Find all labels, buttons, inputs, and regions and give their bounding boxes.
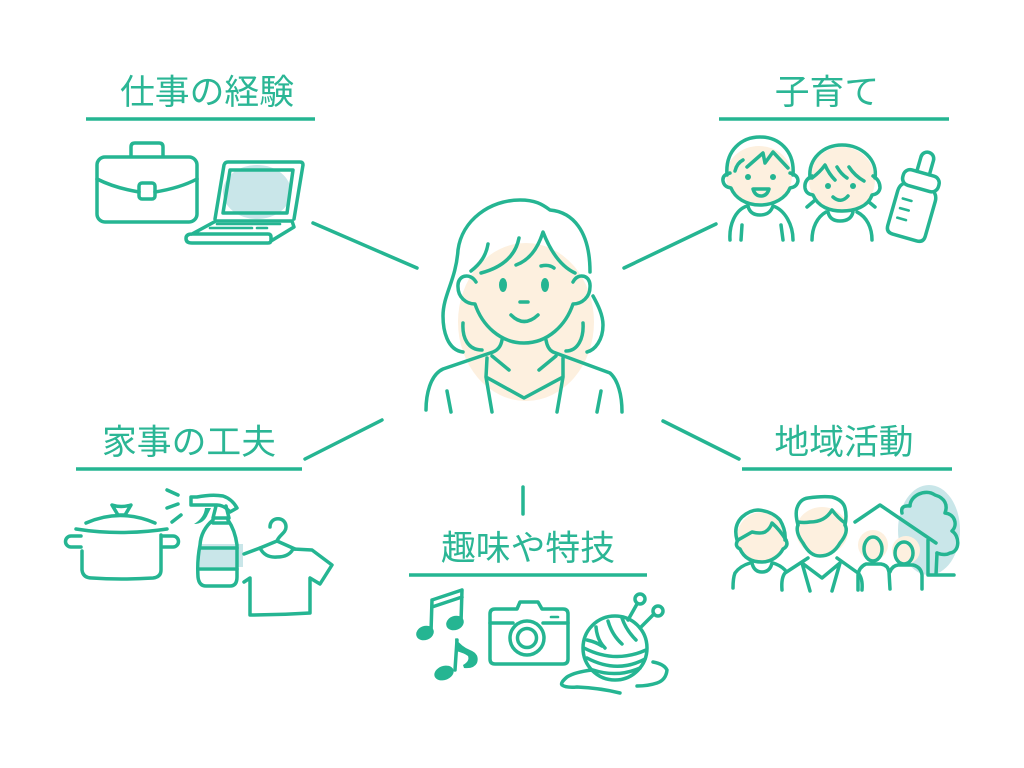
icon: baby bottle bbox=[886, 147, 948, 243]
icon: pot bbox=[66, 505, 178, 579]
icon: ball of yarn with needles bbox=[562, 594, 667, 693]
icon: briefcase bbox=[97, 143, 197, 222]
person: skin background circle bbox=[458, 243, 594, 401]
icon: boy bbox=[723, 137, 798, 240]
icon: spray bottle bbox=[191, 495, 243, 586]
central person illustration bbox=[426, 200, 622, 412]
icon: boy in community bbox=[733, 510, 787, 588]
person: eyes bbox=[499, 278, 549, 292]
icon: eighth note bbox=[432, 638, 478, 683]
icon: man bbox=[782, 497, 862, 591]
heading: work experience: 仕事の経験 bbox=[120, 73, 294, 112]
connector: lower left bbox=[305, 420, 382, 459]
person: face bbox=[458, 265, 590, 343]
heading: community activity: 地域活動 bbox=[774, 423, 914, 462]
icon: beamed musical note bbox=[414, 590, 466, 643]
heading: parenting: 子育て bbox=[775, 73, 879, 112]
person: fringe bbox=[471, 232, 575, 273]
connector: top left bbox=[313, 223, 417, 268]
icon: girl bbox=[805, 145, 880, 240]
icon: T-shirt on hanger bbox=[244, 519, 332, 615]
heading: hobbies and skills: 趣味や特技 bbox=[441, 529, 615, 568]
icon: camera bbox=[490, 602, 568, 664]
connector: bottom bbox=[521, 487, 525, 514]
person: neck and clothes bbox=[426, 340, 622, 412]
icon: spray marks bbox=[167, 490, 181, 522]
connector: lower right bbox=[663, 421, 739, 459]
person: hair outline bbox=[443, 200, 603, 352]
heading: household tips: 家事の工夫 bbox=[102, 423, 276, 462]
icon: laptop bbox=[186, 162, 303, 243]
connector: top right bbox=[624, 224, 716, 268]
icon: small figures bbox=[858, 530, 922, 590]
icon: tree and house bbox=[855, 485, 960, 575]
